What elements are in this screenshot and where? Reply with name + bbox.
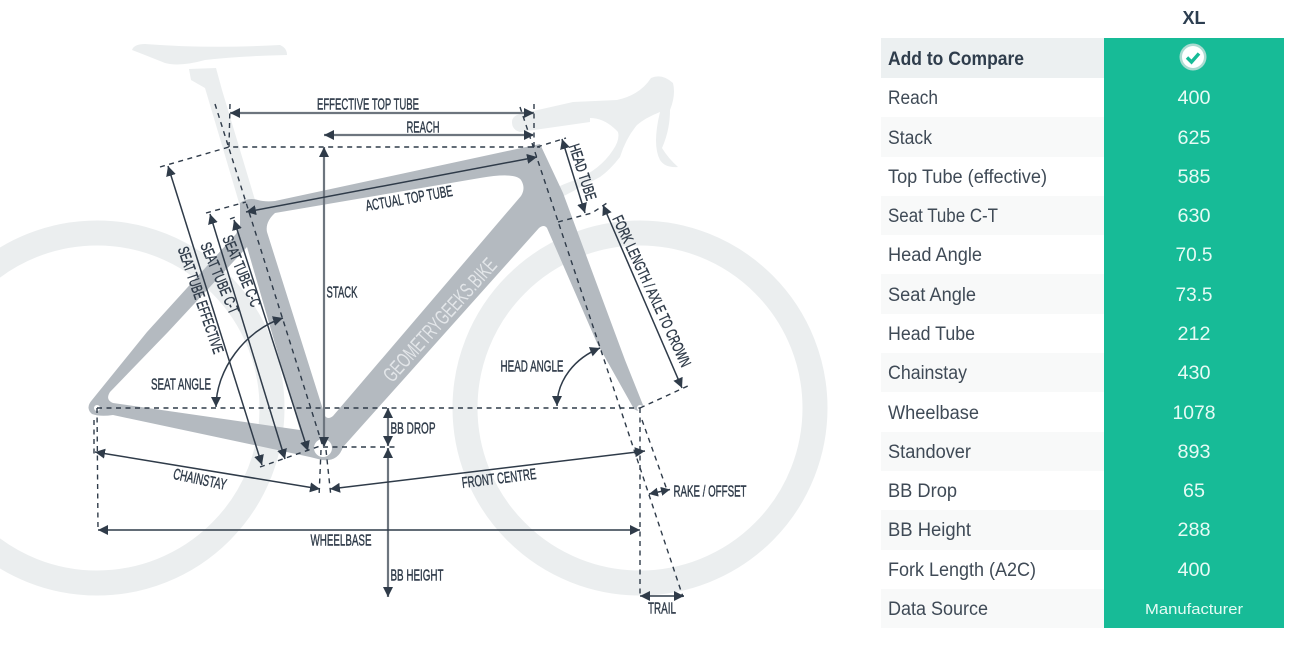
effective top tube arrow [230, 112, 534, 114]
trail arrow [640, 595, 684, 597]
dimension labels: EFFECTIVE TOP TUBE [317, 96, 419, 114]
front centre arrow [330, 451, 645, 489]
fork length arrow [603, 205, 682, 388]
column heading: XL [1182, 8, 1206, 28]
XL values: 400 [1178, 560, 1210, 581]
XL values: 625 [1178, 128, 1210, 149]
row labels: Head Angle [888, 245, 982, 266]
frame and fork [88, 144, 643, 460]
dimension labels: BB DROP [390, 420, 436, 438]
dimension labels: RAKE / OFFSET [674, 484, 747, 500]
dimension labels: BB HEIGHT [390, 568, 444, 584]
reach arrow [324, 134, 534, 136]
seatpost [189, 68, 255, 206]
row labels: Standover [888, 442, 972, 463]
XL values: 288 [1178, 520, 1210, 541]
row labels: Head Tube [888, 324, 975, 345]
saddle [132, 44, 287, 64]
dimension labels: SEAT TUBE EFFECTIVE [174, 245, 226, 356]
row labels: Top Tube (effective) [888, 167, 1047, 188]
compare checkmark icon [1180, 44, 1206, 70]
XL values [1145, 88, 1243, 618]
seat angle arc [216, 318, 283, 407]
highlighted XL column [1104, 38, 1284, 628]
XL values: 893 [1178, 442, 1210, 463]
rear wheel [0, 233, 272, 583]
rake arrow [649, 490, 670, 494]
dimension lines [94, 104, 690, 597]
BB height arrow [387, 448, 389, 597]
XL values: 212 [1178, 324, 1210, 345]
row labels: Chainstay [888, 363, 967, 384]
XL values: 73.5 [1176, 285, 1212, 306]
row backgrounds [881, 38, 1104, 628]
frame brand text: GEOMETRYGEEKS.BIKE [379, 254, 502, 387]
seat tube C-C arrow [234, 220, 308, 451]
dimension labels [151, 96, 747, 618]
XL values: 1078 [1172, 403, 1216, 424]
dimension labels: FRONT CENTRE [461, 466, 537, 492]
XL values: Manufacturer [1145, 601, 1243, 618]
stack arrow [323, 147, 325, 447]
dimension labels: WHEELBASE [310, 532, 372, 550]
row labels: Wheelbase [888, 403, 979, 424]
row labels: Seat Tube C-T [888, 206, 998, 227]
seat tube effective arrow [168, 166, 262, 465]
chainstay arrow [95, 452, 320, 489]
dimension labels: SEAT ANGLE [151, 376, 211, 394]
dimension labels: SEAT TUBE C-T [196, 240, 242, 317]
row labels [888, 49, 1047, 620]
dimension labels: ACTUAL TOP TUBE [364, 183, 454, 215]
row labels: BB Height [888, 520, 972, 541]
XL values: 400 [1178, 88, 1210, 109]
head tube arrow [562, 139, 585, 213]
row labels: Add to Compare [888, 49, 1024, 70]
front dropout [637, 405, 643, 411]
geometry table [881, 8, 1284, 628]
head angle arc [557, 348, 600, 406]
dimension labels: TRAIL [648, 600, 676, 618]
dimension labels: FORK LENGTH / AXLE TO CROWN [609, 213, 694, 370]
bicycle silhouette [0, 44, 815, 583]
rear dropout [94, 405, 100, 411]
XL values: 70.5 [1176, 245, 1212, 266]
XL values: 630 [1178, 206, 1210, 227]
row labels: Stack [888, 128, 932, 149]
row labels: Data Source [888, 599, 988, 620]
bottom bracket [314, 439, 332, 457]
dimension labels: HEAD ANGLE [500, 358, 564, 376]
XL values: 430 [1178, 363, 1210, 384]
seat tube C-T arrow [210, 214, 285, 459]
XL values: 585 [1178, 167, 1210, 188]
dimension labels: CHAINSTAY [172, 466, 228, 494]
dimension labels: SEAT TUBE C-C [218, 233, 264, 310]
row labels: BB Drop [888, 481, 957, 502]
wheelbase arrow [98, 529, 640, 531]
row labels: Reach [888, 88, 938, 109]
actual top tube arrow [246, 157, 537, 212]
row labels: Fork Length (A2C) [888, 560, 1036, 581]
dimension labels: REACH [406, 120, 440, 136]
dimension labels: HEAD TUBE [565, 142, 599, 203]
XL values: 65 [1183, 481, 1205, 502]
front wheel [465, 233, 815, 583]
handlebar [512, 76, 678, 197]
BB drop arrow [387, 408, 389, 446]
dimension labels: STACK [326, 284, 358, 302]
row labels: Seat Angle [888, 285, 976, 306]
